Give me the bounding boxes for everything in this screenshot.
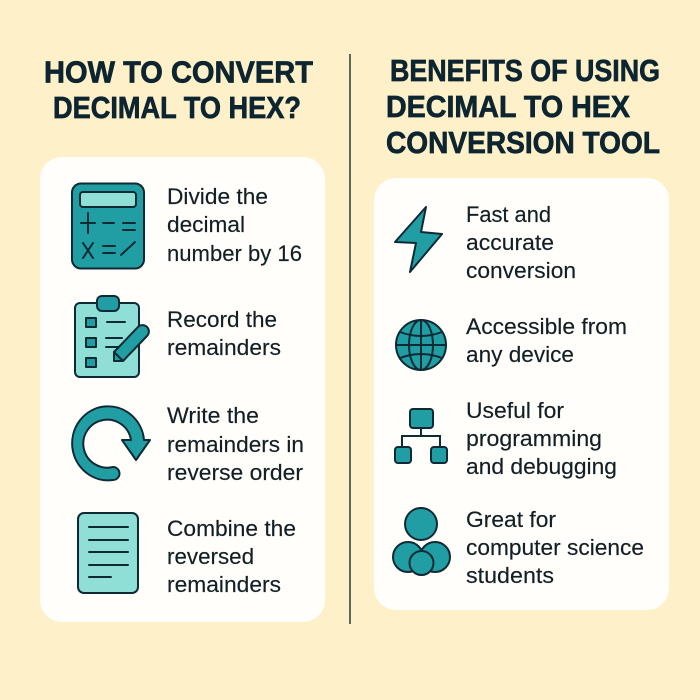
text: combine	[167, 516, 296, 597]
text: write: Write the	[167, 403, 259, 428]
text: record: Record the	[167, 307, 277, 332]
icon: clipboard with pencil	[75, 296, 149, 377]
heading: benefits: BENEFITS OF USING	[390, 53, 660, 88]
panel: conversion steps	[40, 157, 325, 622]
text: fast	[466, 202, 576, 283]
heading: how to convert: HOW TO CONVERT	[44, 54, 313, 90]
text: write: remainders in	[167, 432, 304, 457]
text: divide: decimal	[167, 212, 245, 237]
text: combine: Combine the	[167, 516, 296, 541]
text: divide: number by 16	[167, 241, 302, 266]
text: useful	[466, 398, 617, 479]
text: write: reverse order	[167, 460, 303, 485]
text: record: remainders	[167, 335, 281, 360]
heading: benefits: CONVERSION TOOL	[386, 125, 660, 160]
text: great: computer science	[466, 535, 644, 560]
text: great: students	[466, 563, 554, 588]
icon: group of people	[393, 508, 450, 575]
text: fast: Fast and	[466, 202, 551, 227]
heading: how to convert	[44, 54, 313, 125]
text: useful: Useful for	[466, 398, 564, 423]
text: divide	[167, 184, 302, 266]
panel: benefits	[374, 178, 669, 610]
icon: hierarchy	[395, 409, 447, 463]
text: record	[167, 307, 281, 360]
text: fast: accurate	[466, 230, 554, 255]
text: accessible: Accessible from	[466, 314, 627, 339]
text: combine: remainders	[167, 572, 281, 597]
text: useful: and debugging	[466, 454, 617, 479]
heading: benefits	[386, 53, 660, 160]
icon: lightning bolt	[395, 207, 442, 272]
text: accessible: any device	[466, 342, 574, 367]
text: divide: Divide the	[167, 184, 268, 209]
heading: how to convert: DECIMAL TO HEX?	[53, 90, 301, 125]
icon: circular arrow	[72, 406, 150, 480]
text: fast: conversion	[466, 258, 576, 283]
text: great: Great for	[466, 507, 556, 532]
heading: benefits: DECIMAL TO HEX	[386, 89, 630, 124]
icon: calculator	[72, 184, 144, 268]
text: accessible	[466, 314, 627, 367]
text: combine: reversed	[167, 544, 254, 569]
icon: document	[78, 513, 138, 593]
text: useful: programming	[466, 426, 602, 451]
icon: globe	[396, 320, 446, 370]
text: write	[167, 403, 304, 485]
text: great	[466, 507, 644, 588]
